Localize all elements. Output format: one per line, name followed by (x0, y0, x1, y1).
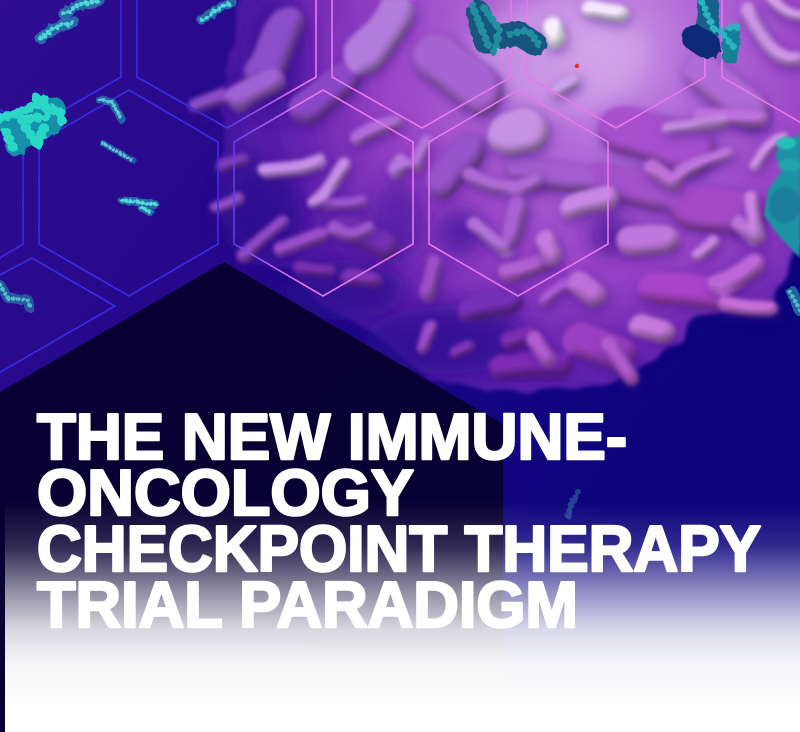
cell body (216, 0, 800, 392)
icon: small molecule lower left (0, 285, 30, 308)
title: TRIAL PARADIGM (37, 568, 578, 641)
icon: large teal molecule (0, 98, 62, 150)
icon: small molecule top centre (202, 2, 232, 20)
title: THE NEW IMMUNE- (37, 400, 627, 473)
cell surface: front lobes (535, 0, 800, 378)
cell surface: finger-like protrusions (194, 78, 548, 355)
proteins: dark teal molecules on the cell (472, 2, 742, 55)
icon: small molecule 3 (122, 200, 155, 212)
icon: small molecule right edge (790, 292, 800, 310)
title: CHECKPOINT THERAPY (37, 512, 761, 585)
cell shading (220, 0, 650, 374)
icon: small molecule top left (40, 0, 100, 38)
icon: small molecule 2 (102, 143, 134, 161)
protein: large teal molecule at right edge (764, 135, 800, 258)
icon: faint molecule (566, 492, 578, 520)
dark hexagonal panel (0, 262, 503, 732)
cell surface: rear lobes (262, 15, 750, 365)
icon: small molecule 1 (100, 100, 122, 120)
white bottom area (5, 708, 800, 732)
white fade at the bottom (5, 500, 800, 710)
illustration: immune cell (194, 0, 800, 392)
title (37, 400, 761, 641)
icon: molecule centre (472, 5, 540, 52)
title: ONCOLOGY (37, 456, 414, 529)
proteins: teal antibody molecules on the left (0, 0, 800, 520)
red dot (575, 64, 579, 68)
decorative hexagon grid (0, 0, 800, 378)
icon: molecule top right (695, 2, 742, 55)
